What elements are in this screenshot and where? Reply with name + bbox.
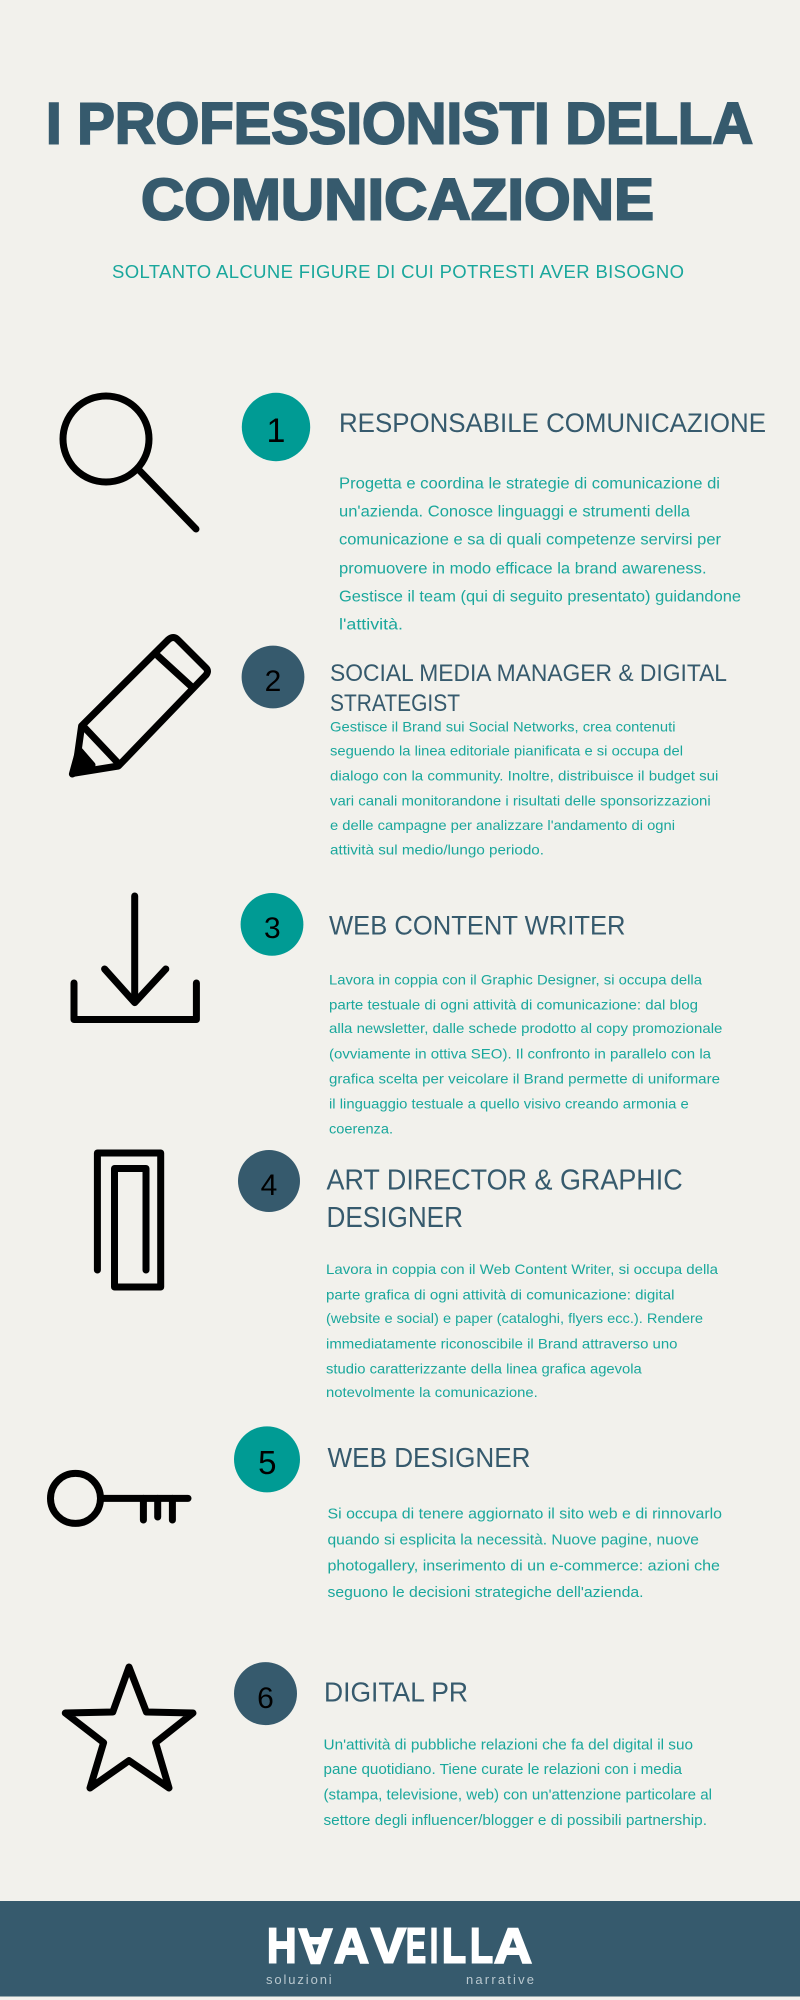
number badge 4 [238, 1150, 300, 1212]
text block: notevolmente la comunicazione. [326, 1384, 538, 1400]
text block: promuovere in modo efficace la brand awareness. [339, 560, 707, 577]
text block: grafica scelta per veicolare il Brand permette di uniformare [329, 1070, 720, 1086]
number badge 6: 6 [257, 1682, 274, 1715]
logo wordmark: L [442, 1919, 466, 1973]
text block [330, 719, 718, 857]
logo wordmark: H [267, 1919, 296, 1973]
logo wordmark: E [406, 1919, 426, 1973]
text block: e delle campagne per analizzare l'andamento di ogni [330, 817, 675, 833]
text block: parte grafica di ogni attività di comunicazione: digital [326, 1286, 674, 1302]
logo wordmark: I [430, 1919, 438, 1973]
number badge 2 [242, 646, 304, 708]
text block: Lavora in coppia con il Web Content Writer, si occupa della [326, 1261, 718, 1277]
panel: digital pr [65, 1662, 712, 1829]
icon: magnifying glass [63, 396, 196, 529]
text block: seguendo la linea editoriale pianificata e si occupa del [330, 743, 683, 759]
logo tagline: soluzioni [266, 1972, 332, 1987]
text block: Gestisce il Brand sui Social Networks, crea contenuti [330, 719, 676, 735]
text block: il linguaggio testuale a quello visivo creando armonia e [329, 1095, 689, 1111]
logo wordmark: A [298, 1918, 333, 1972]
title: I PROFESSIONISTI DELLA [46, 92, 753, 156]
heading: ART DIRECTOR & GRAPHIC [326, 1165, 683, 1197]
text block: coerenza. [329, 1120, 393, 1136]
text block [329, 971, 723, 1136]
number badge 3 [241, 893, 303, 956]
subtitle: SOLTANTO ALCUNE FIGURE DI CUI POTRESTI AVER BISOGNO [112, 261, 684, 282]
logo tagline: narrative [466, 1972, 534, 1987]
icon: download arrow [74, 896, 196, 1020]
text block: Un'attività di pubbliche relazioni che fa del digital il suo [324, 1736, 693, 1753]
icon: key [50, 1473, 188, 1523]
text block: Progetta e coordina le strategie di comunicazione di [339, 475, 720, 492]
number badge 2: 2 [265, 665, 281, 698]
logo tagline [266, 1972, 534, 1987]
logo wordmark: V [371, 1919, 406, 1973]
text block: studio caratterizzante della linea grafica agevola [326, 1360, 642, 1376]
text block: l'attività. [339, 616, 403, 633]
panel: web content writer [74, 893, 723, 1136]
number badge 6 [234, 1662, 297, 1725]
number badge 5 [234, 1426, 300, 1492]
text block: attività sul medio/lungo periodo. [330, 841, 544, 857]
heading: SOCIAL MEDIA MANAGER & DIGITAL [330, 660, 727, 687]
title: COMUNICAZIONE [141, 168, 654, 232]
text block: quando si esplicita la necessità. Nuove pagine, nuove [328, 1531, 699, 1548]
logo wordmark [267, 1918, 532, 1973]
logo wordmark: L [470, 1919, 493, 1973]
number badge 1 [242, 393, 310, 461]
text block [326, 1261, 718, 1400]
text block: seguono le decisioni strategiche dell'azienda. [328, 1584, 644, 1601]
text block: parte testuale di ogni attività di comunicazione: dal blog [329, 996, 698, 1012]
text block [328, 1505, 722, 1601]
text block: pane quotidiano. Tiene curate le relazioni con i media [324, 1761, 683, 1778]
panel: responsabile comunicazione [63, 393, 766, 633]
title [46, 92, 753, 232]
number badge 4: 4 [261, 1169, 277, 1202]
heading [326, 1165, 683, 1234]
text block [324, 1736, 712, 1829]
heading: DIGITAL PR [324, 1677, 468, 1708]
text block: photogallery, inserimento di un e-commerce: azioni che [328, 1557, 720, 1574]
text block: (stampa, televisione, web) con un'attenzione particolare al [324, 1786, 712, 1803]
text block: Lavora in coppia con il Graphic Designer, si occupa della [329, 971, 702, 987]
text block: settore degli influencer/blogger e di possibili partnership. [324, 1812, 707, 1829]
text block: immediatamente riconoscibile il Brand attraverso uno [326, 1335, 678, 1351]
text block: comunicazione e sa di quali competenze servirsi per [339, 532, 721, 549]
number badge 1: 1 [267, 412, 285, 450]
heading: WEB DESIGNER [328, 1442, 530, 1473]
icon: star [65, 1667, 193, 1788]
logo wordmark: A [334, 1919, 369, 1973]
footer band [0, 1901, 800, 1996]
text block: alla newsletter, dalle schede prodotto al copy promozionale [329, 1020, 723, 1036]
panel: art director [97, 1150, 718, 1400]
text block: (website e social) e paper (cataloghi, flyers ecc.). Rendere [326, 1310, 703, 1326]
heading: WEB CONTENT WRITER [329, 911, 626, 941]
text block: dialogo con la community. Inoltre, distribuisce il budget sui [330, 768, 718, 784]
heading [330, 660, 727, 717]
text block: Si occupa di tenere aggiornato il sito web e di rinnovarlo [328, 1505, 722, 1522]
icon: paper clip [97, 1153, 161, 1287]
text block [339, 475, 741, 633]
logo wordmark: A [494, 1919, 532, 1973]
panel: web designer [50, 1426, 722, 1601]
text block: Gestisce il team (qui di seguito presentato) guidandone [339, 588, 741, 605]
heading: RESPONSABILE COMUNICAZIONE [339, 408, 766, 438]
icon: pencil [72, 638, 208, 774]
text block: un'azienda. Conosce linguaggi e strumenti della [339, 504, 690, 521]
number badge 5: 5 [258, 1444, 276, 1481]
number badge 3: 3 [264, 912, 281, 945]
text block: (ovviamente in ottiva SEO). Il confronto in parallelo con la [329, 1045, 711, 1061]
text block: vari canali monitorandone i risultati delle sponsorizzazioni [330, 792, 711, 808]
heading: STRATEGIST [330, 690, 460, 717]
panel: social media manager [72, 638, 727, 857]
heading: DESIGNER [326, 1202, 463, 1234]
